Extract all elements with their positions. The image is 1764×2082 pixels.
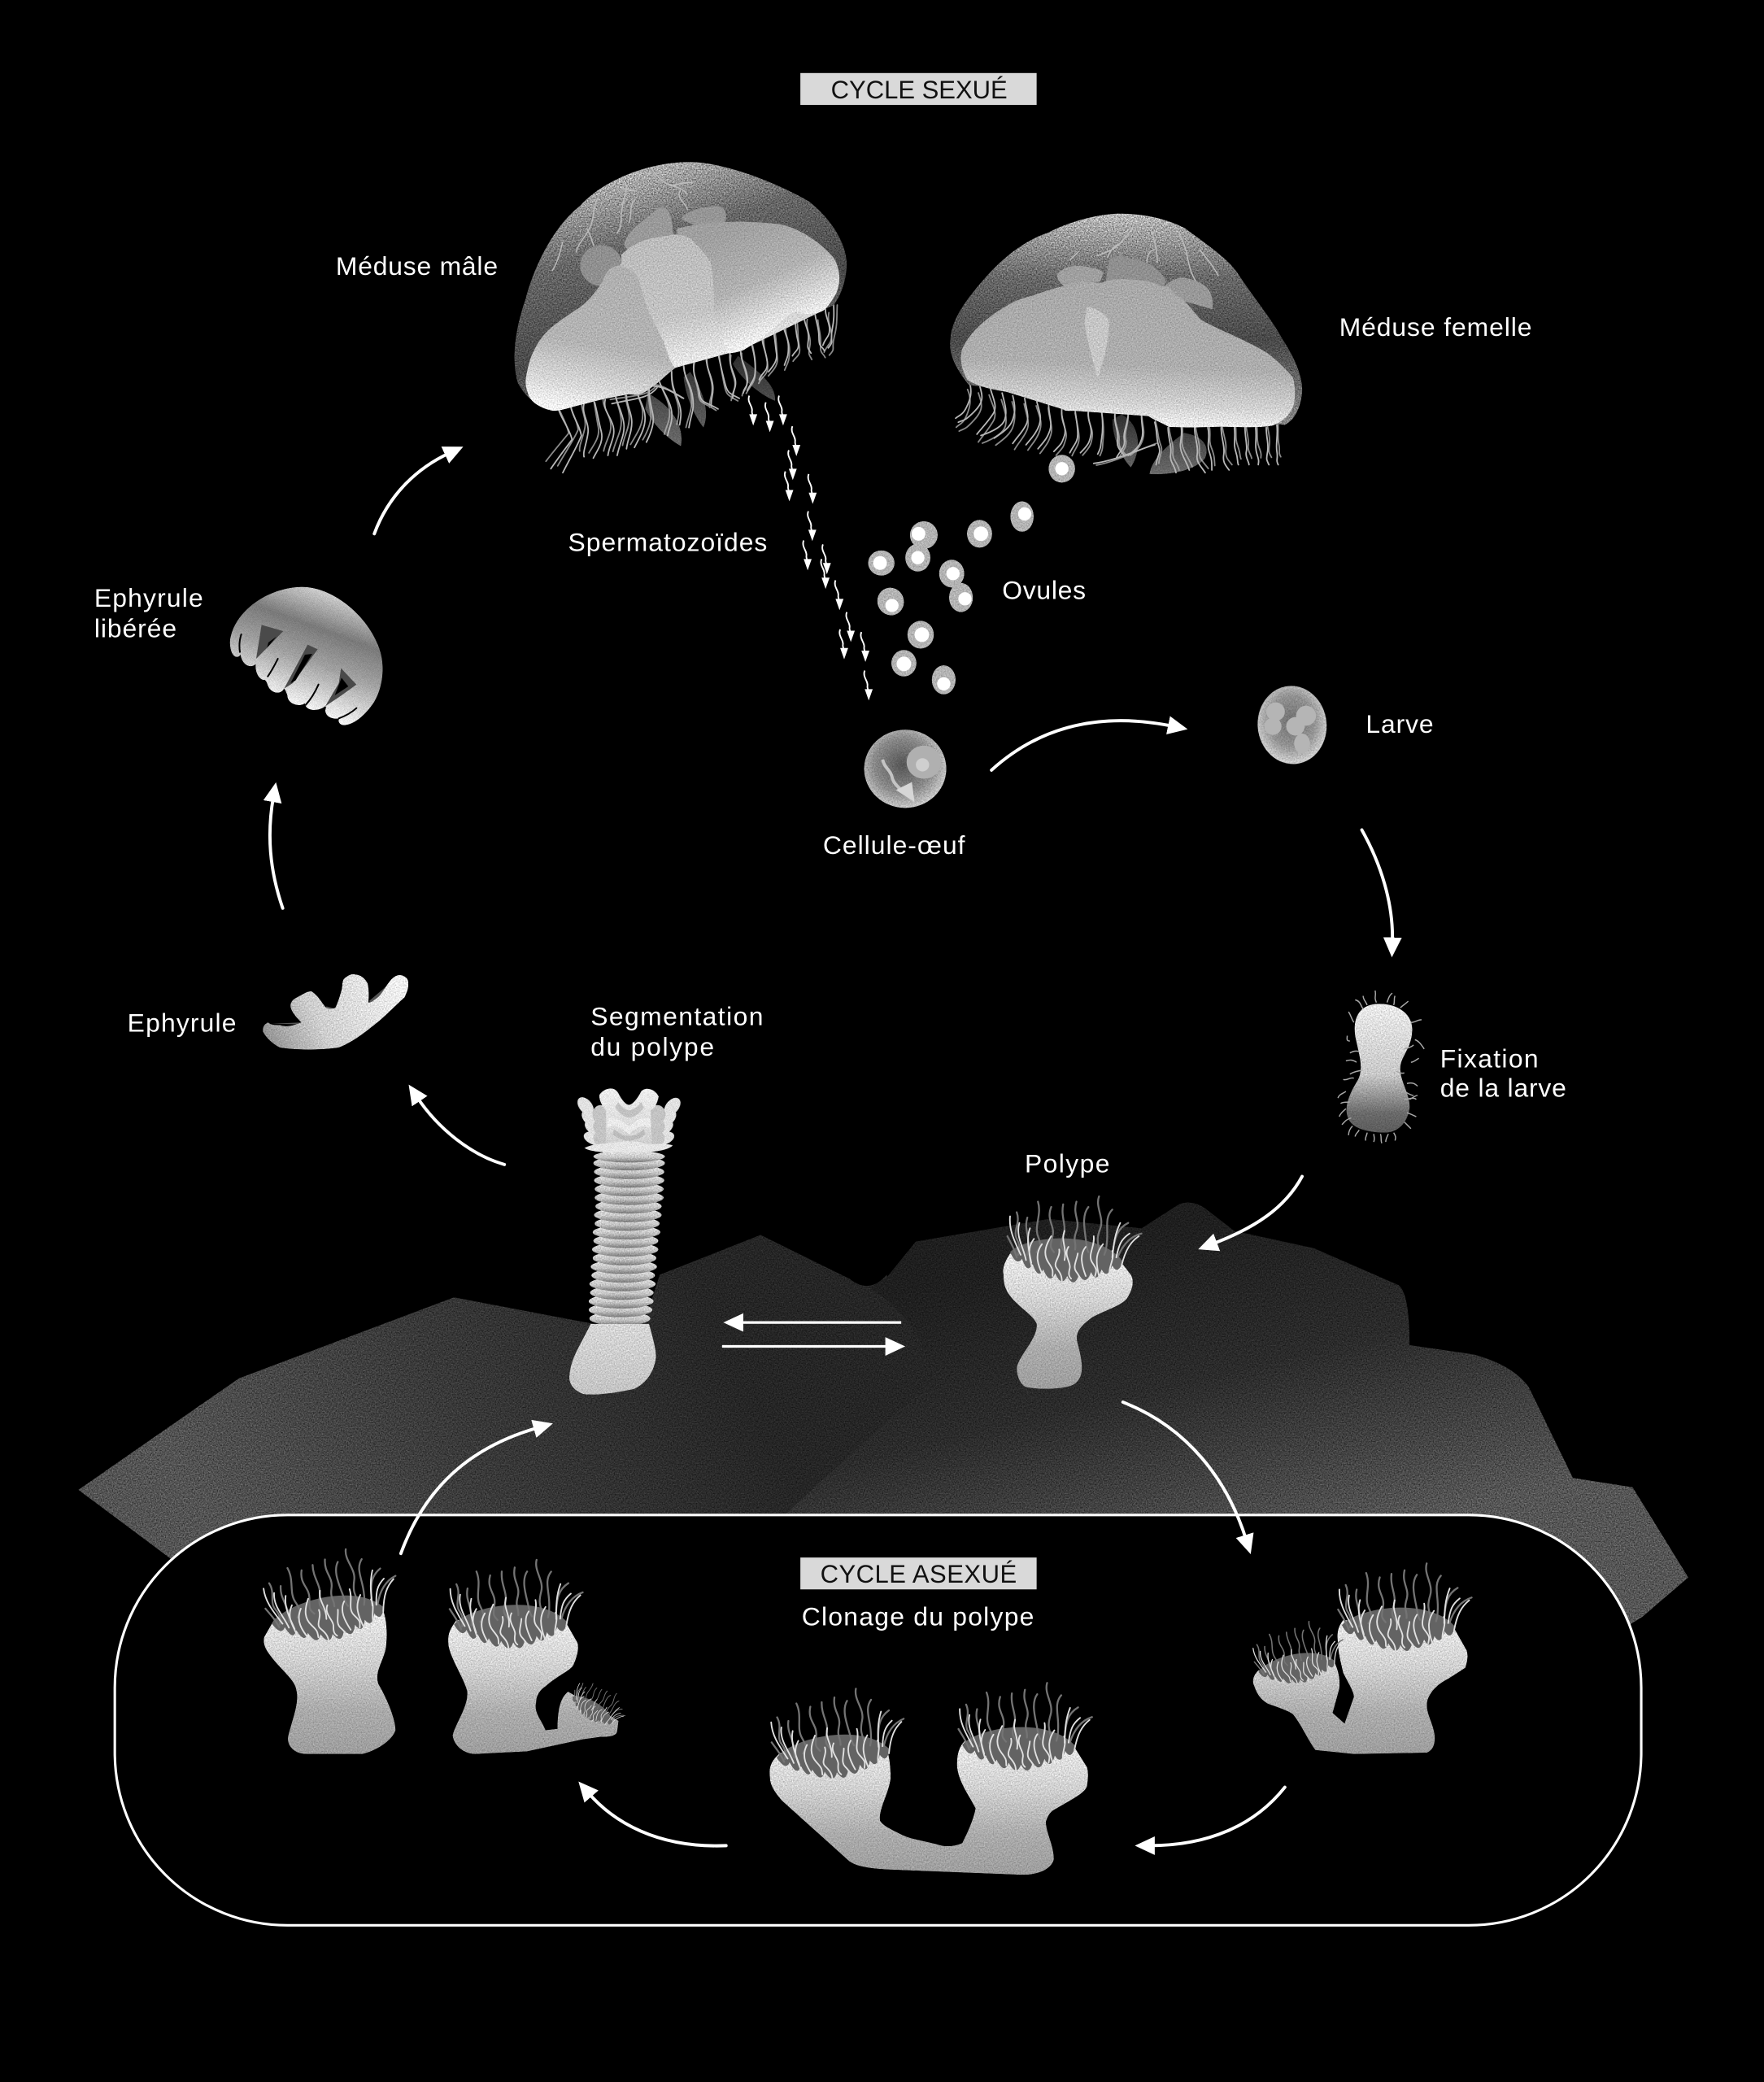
label: ovules: Ovules (1002, 575, 1086, 604)
label: méduse femelle: Méduse femelle (1339, 312, 1531, 342)
ovules (868, 455, 1075, 695)
label: polype: Polype (1025, 1149, 1109, 1178)
label: segmentation du polype: Segmentation (590, 1001, 763, 1030)
label: fixation de la larve (1440, 1044, 1566, 1103)
heading: cycle sexué (800, 73, 1037, 105)
label: ephyrule: Ephyrule (128, 1008, 237, 1038)
arrow: egg to larva (991, 721, 1174, 770)
label: cellule-œuf: Cellule-œuf (823, 830, 965, 860)
rocky seabed (78, 1202, 1688, 1726)
arrow: freed ephyrule to male jellyfish (374, 453, 450, 534)
label: segmentation du polype: du polype (590, 1032, 714, 1061)
female bell veins (1069, 219, 1218, 292)
ephyrule (263, 974, 408, 1050)
arrow: fixation to polyp (1212, 1177, 1302, 1244)
fixed larva (1338, 991, 1424, 1143)
heading: cycle sexué: CYCLE SEXUÉ (831, 76, 1008, 104)
male tentacles and oral arms (546, 290, 838, 480)
label: ephyrule libérée: Ephyrule (94, 583, 203, 612)
fertilised egg (864, 730, 947, 808)
label: méduse mâle: Méduse mâle (336, 251, 498, 281)
arrow: polyp to cloning (1123, 1402, 1246, 1540)
label: larve: Larve (1365, 709, 1434, 738)
female bell (950, 214, 1302, 425)
male jellyfish (515, 162, 847, 480)
male bell veins (552, 168, 693, 271)
foot (569, 1324, 656, 1395)
arrow: ephyrule to freed ephyrule (270, 797, 283, 908)
spermatozoa (749, 396, 873, 700)
arrow: U-polyp to budding polyp (588, 1792, 726, 1846)
flared crown (574, 1088, 684, 1153)
female jellyfish (950, 214, 1302, 481)
arrows: reversible polyp segmentation (722, 1322, 901, 1347)
clone stage: single polyp (256, 1540, 407, 1754)
label: segmentation du polype (590, 1001, 763, 1061)
male bell (515, 162, 847, 407)
freed ephyrule (230, 587, 383, 725)
label: spermatozoïdes: Spermatozoïdes (568, 528, 767, 557)
female lobes (960, 255, 1295, 428)
segmenting polyp (569, 1088, 684, 1395)
arrow: larva to fixation (1361, 830, 1392, 943)
panel: asexual cycle frame (115, 1515, 1641, 1925)
clone stage: polyp with grown bud (1248, 1561, 1475, 1754)
polyp (1003, 1196, 1142, 1389)
arrow: clone to segmenting polyp (401, 1427, 539, 1553)
male lobes (525, 206, 839, 411)
clone stage: two joined polyps (765, 1680, 1095, 1875)
label: fixation de la larve: de la larve (1440, 1074, 1566, 1103)
label: ephyrule libérée: libérée (94, 614, 176, 643)
larva (1254, 682, 1331, 768)
clone stage: polyp with small bud (446, 1555, 633, 1754)
label: fixation de la larve: Fixation (1440, 1044, 1539, 1074)
label: ephyrule libérée (94, 583, 203, 643)
heading: cycle asexué: CYCLE ASEXUÉ (821, 1560, 1017, 1588)
female tentacles and oral arms (954, 373, 1281, 481)
arrow: segmentation to ephyrule (416, 1097, 504, 1165)
arrow: bud polyp to U-polyp (1149, 1788, 1285, 1845)
stem rings (589, 1151, 665, 1326)
label: clonage du polype: Clonage du polype (802, 1601, 1034, 1631)
